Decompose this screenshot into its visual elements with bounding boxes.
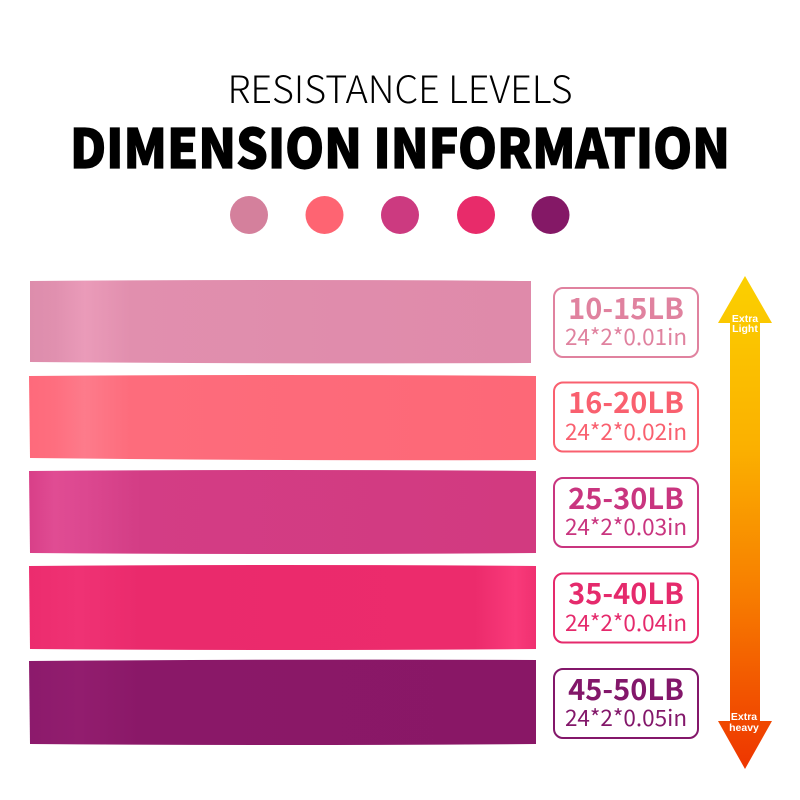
swatch: magenta	[381, 196, 419, 234]
label: 25-30LB	[554, 476, 698, 547]
label: 25-30LB: 24*2*0.03in	[565, 510, 687, 542]
label: 10-15LB: 24*2*0.01in	[565, 320, 687, 352]
label: 16-20LB: 16-20LB	[568, 380, 684, 422]
label: 16-20LB	[554, 380, 698, 452]
title: dimension information: DIMENSION INFORMATION	[70, 105, 730, 184]
label: 45-50LB: 45-50LB	[568, 667, 684, 709]
colour swatches	[230, 196, 570, 234]
arrow label: extra heavy: Extra	[731, 711, 757, 723]
swatch: purple	[532, 196, 570, 234]
label: 35-40LB: 24*2*0.04in	[565, 606, 687, 638]
band: hot pink	[29, 565, 536, 650]
arrow: resistance scale	[718, 276, 772, 769]
band: light pink	[30, 280, 531, 363]
label: 25-30LB: 25-30LB	[568, 476, 684, 518]
swatch: light pink	[230, 196, 268, 234]
label: 10-15LB: 10-15LB	[568, 286, 684, 328]
arrow: resistance scale: Light	[732, 323, 758, 335]
band: coral	[29, 375, 536, 460]
arrow: resistance scale: heavy	[729, 722, 759, 734]
label: 45-50LB: 24*2*0.05in	[565, 701, 687, 733]
label: 10-15LB	[554, 286, 698, 357]
swatch: coral	[306, 196, 344, 234]
label: 45-50LB	[554, 667, 698, 738]
subtitle: resistance levels: RESISTANCE LEVELS	[228, 59, 572, 114]
swatch: hot pink	[457, 196, 495, 234]
label: 35-40LB	[554, 571, 698, 642]
label: 35-40LB: 35-40LB	[568, 571, 684, 613]
label: 16-20LB: 24*2*0.02in	[565, 415, 687, 447]
band: magenta	[29, 470, 536, 554]
resistance bands	[29, 280, 536, 745]
arrow label: extra light: Extra	[732, 313, 758, 325]
band: purple	[29, 660, 536, 745]
